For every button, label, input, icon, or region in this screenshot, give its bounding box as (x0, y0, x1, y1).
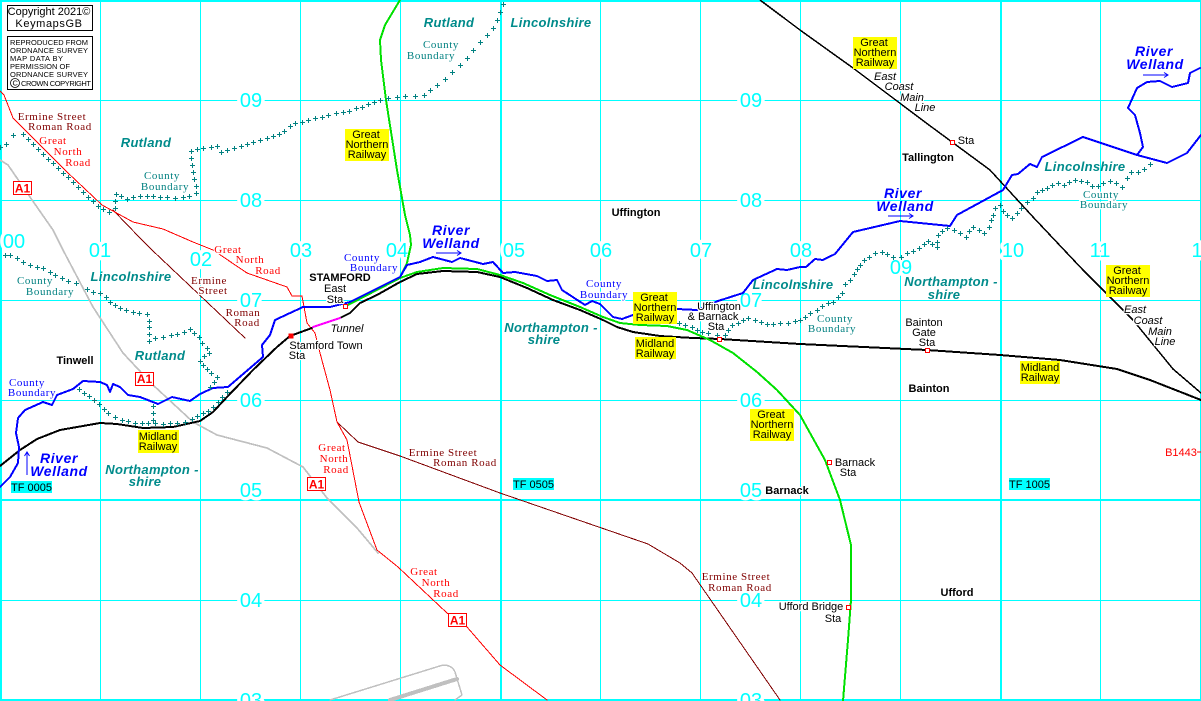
grid reference numbers: 04 (240, 590, 262, 612)
grid reference numbers: 06 (740, 390, 762, 412)
River Welland label, south west (24, 450, 88, 479)
county names: Lincolnshire (1045, 159, 1125, 174)
county boundary labels: Boundary (1080, 199, 1128, 211)
Ermine Street labels: Roman (226, 307, 260, 319)
label: Midland Railway, east: Midland (1021, 362, 1059, 374)
road sign B1443: B1443 (1165, 447, 1197, 459)
East Coast Main Line label, north: Main (900, 92, 924, 104)
label: Great Northern Railway, east: Northern (1107, 275, 1149, 287)
label: Great Northern Railway, Uffington: Railway (636, 312, 675, 324)
Ordnance Survey notice: CROWN COPYRIGHT (21, 79, 91, 88)
county boundary labels: County (817, 313, 853, 325)
road sign A1 north: A1 (15, 182, 30, 196)
Great North Road (0, 91, 547, 700)
grid reference numbers: 06 (240, 390, 262, 412)
grid reference numbers: 03 (290, 240, 312, 262)
grid reference numbers: 09 (890, 257, 912, 279)
county boundary labels: County (17, 275, 53, 287)
county boundary labels: Boundary (407, 50, 455, 62)
station names: Barnack (835, 457, 876, 469)
station names: Ufford Bridge (779, 601, 843, 613)
place names: Uffington (612, 207, 661, 219)
station names: East (324, 283, 346, 295)
label: Midland Railway, centre: Midland (636, 338, 674, 350)
label: Great Northern Railway, Uffington (633, 292, 677, 324)
county boundary labels: County (144, 170, 180, 182)
county boundary crosses: west (5, 255, 217, 387)
Ermine Street labels: Ermine (191, 275, 227, 287)
grid reference numbers: 02 (190, 249, 212, 271)
county names: Northampton - (904, 274, 998, 289)
place names: Tallington (902, 152, 954, 164)
label: Great Northern Railway, east: Great (1113, 265, 1141, 277)
grid reference numbers: 09 (740, 90, 762, 112)
county names: Northampton - (504, 320, 598, 335)
River Welland label, centre: River (884, 185, 923, 201)
grid reference numbers: 00 (3, 231, 25, 253)
Ermine Street labels: Roman Road (433, 457, 497, 469)
airfield outline (330, 665, 462, 700)
station names: Sta (840, 467, 857, 479)
county boundary labels: County (1083, 189, 1119, 201)
river county boundary labels: County (344, 252, 380, 264)
Ermine Street Roman road (113, 210, 780, 700)
county boundary labels: Boundary (141, 181, 189, 193)
River Welland label, Stamford: Welland (422, 235, 480, 251)
label: Great Northern Railway, Tallington (853, 37, 897, 69)
place names (56, 152, 974, 599)
county boundary crosses: east (679, 164, 1150, 335)
copyright box: Copyright 2021© (8, 6, 90, 18)
Stamford tunnel (313, 318, 340, 327)
Great North Road labels: North (320, 453, 348, 465)
East Coast Main Line label, north (874, 71, 935, 114)
station names: Sta (825, 613, 842, 625)
grid reference numbers: 07 (740, 290, 762, 312)
grid reference numbers: 08 (740, 190, 762, 212)
grid reference numbers: 05 (240, 480, 262, 502)
label: Great Northern Railway, north Stamford (345, 129, 389, 161)
label: Great Northern Railway, north Stamford: Northern (346, 139, 388, 151)
label: Midland Railway, centre: Railway (636, 348, 675, 360)
River Welland label, north east: River (1135, 43, 1174, 59)
grid reference numbers: 04 (740, 590, 762, 612)
label: Great Northern Railway, north Stamford: Great (352, 129, 380, 141)
label: Midland Railway, west: Railway (139, 441, 178, 453)
Great North Road labels: North (236, 254, 264, 266)
Great North Road labels: Great (39, 135, 67, 147)
Great North Road labels: North (54, 146, 82, 158)
county boundary labels: County (423, 39, 459, 51)
county boundary labels: Boundary (26, 286, 74, 298)
station names: Sta (958, 135, 975, 147)
river county boundary labels (8, 252, 628, 399)
label: Great Northern Railway, east: Railway (1109, 285, 1148, 297)
Ordnance Survey notice: MAP DATA BY (10, 54, 63, 63)
Great North Road labels: Great (410, 566, 438, 578)
county names: Lincolnshire (753, 277, 833, 292)
river county boundary labels: County (9, 377, 45, 389)
station names: Sta (327, 294, 344, 306)
label: Great Northern Railway, Tallington: Northern (854, 47, 896, 59)
label: Great Northern Railway, south: Railway (753, 429, 792, 441)
Great North Road labels: Great (318, 442, 346, 454)
grid reference numbers: 04 (386, 240, 408, 262)
East Coast Main Line label, north: Line (915, 102, 935, 114)
grid reference numbers: 06 (590, 240, 612, 262)
grid square tag TF 0505: TF 0505 (513, 479, 554, 491)
Great North Road labels: Great (214, 244, 242, 256)
Ermine Street labels: Ermine Street (702, 571, 770, 583)
River Welland label, north east (1126, 43, 1184, 78)
River Welland (0, 68, 1201, 487)
county names: shire (528, 332, 560, 347)
road sign A1 south of Stamford: A1 (309, 478, 324, 492)
label: Great Northern Railway, south: Northern (751, 419, 793, 431)
label: Midland Railway, east: Railway (1021, 372, 1060, 384)
county names: shire (129, 474, 161, 489)
label: Great Northern Railway, Tallington: Railway (856, 57, 895, 69)
Ermine Street labels: Roman Road (28, 121, 92, 133)
East Coast Main Line label, north: Coast (885, 81, 914, 93)
county boundary labels (17, 39, 1128, 335)
grid reference numbers: 07 (690, 240, 712, 262)
Great North Road labels: Road (65, 157, 91, 169)
East Coast Main Line label, south: East (1124, 304, 1147, 316)
grid reference numbers: 10 (1002, 240, 1024, 262)
county names: Rutland (135, 348, 186, 363)
grid reference numbers: 09 (240, 90, 262, 112)
road sign A1 Tinwell: A1 (137, 372, 152, 386)
station names: Uffington (697, 301, 741, 313)
grid reference numbers: 05 (503, 240, 525, 262)
label: Midland Railway, centre (635, 337, 676, 360)
county boundary labels: Boundary (808, 323, 856, 335)
county names: Lincolnshire (511, 15, 591, 30)
Ordnance Survey notice: REPRODUCED FROM (10, 38, 88, 47)
station names: Tunnel (331, 323, 364, 335)
Ordnance Survey notice (8, 36, 92, 90)
label: Great Northern Railway, Uffington: Northern (634, 302, 676, 314)
Great North Road labels: North (422, 577, 450, 589)
Great North Road labels: Road (255, 265, 281, 277)
grid reference numbers: 11 (1090, 240, 1110, 262)
Ermine Street labels: Street (198, 285, 228, 297)
river county boundary labels: Boundary (350, 262, 398, 274)
label: Great Northern Railway, Tallington: Great (860, 37, 888, 49)
grid reference numbers: 08 (790, 240, 812, 262)
place names: Ufford (940, 587, 974, 599)
East Coast Main Line label, north: East (874, 71, 897, 83)
station names: & Barnack (688, 311, 739, 323)
label: Great Northern Railway, north Stamford: Railway (348, 149, 387, 161)
station names: Sta (708, 321, 725, 333)
River Welland label, centre: Welland (876, 198, 934, 214)
station names: Stamford Town (289, 340, 363, 352)
label: Great Northern Railway, south: Great (757, 409, 785, 421)
River Welland label, south west: Welland (30, 463, 88, 479)
county names: shire (928, 287, 960, 302)
East Coast Main Line railway (760, 0, 1201, 393)
B1443 road stub (1197, 451, 1201, 453)
label: Midland Railway, east (1020, 361, 1060, 384)
Great Northern Railway line (346, 0, 851, 701)
River Welland label, south west: River (40, 450, 79, 466)
grid reference numbers: 08 (240, 190, 262, 212)
River Welland label, Stamford: River (432, 222, 471, 238)
river county boundary labels: Boundary (8, 387, 56, 399)
Great North Road labels (39, 135, 459, 600)
station markers (288, 140, 954, 610)
place names: Barnack (765, 485, 810, 497)
Midland Railway line (0, 271, 1201, 466)
grid reference numbers: 05 (740, 480, 762, 502)
county boundary crosses: north (0, 4, 503, 212)
county names (91, 15, 1125, 489)
Ordnance Survey notice: ORDNANCE SURVEY (10, 70, 88, 79)
River Welland label, centre (876, 185, 934, 218)
label: Great Northern Railway, south (750, 409, 794, 441)
station names: Gate (912, 327, 936, 339)
copyright box (8, 6, 92, 30)
county boundary crosses: short branch (152, 406, 154, 420)
Great North Road labels: Road (433, 588, 459, 600)
Ermine Street labels: Ermine Street (409, 447, 477, 459)
Ordnance Survey notice: C (12, 78, 18, 88)
river county boundary labels: Boundary (580, 289, 628, 301)
road sign A1 south: A1 (450, 614, 465, 628)
River Welland label, Stamford (422, 222, 480, 256)
county names: Northampton - (105, 462, 199, 477)
Ermine Street labels: Ermine Street (18, 111, 86, 123)
Ermine Street labels (18, 111, 772, 594)
Ordnance Survey notice: ORDNANCE SURVEY (10, 46, 88, 55)
place names: Tinwell (56, 355, 94, 367)
Ermine Street labels: Road (234, 317, 260, 329)
East Coast Main Line label, south: Coast (1134, 315, 1163, 327)
county names: Rutland (424, 15, 475, 30)
label: Midland Railway, west (138, 430, 179, 453)
station names: Sta (289, 350, 306, 362)
East Coast Main Line label, south (1124, 304, 1175, 348)
station names (289, 135, 975, 625)
river county boundary labels: County (586, 278, 622, 290)
place names: STAMFORD (309, 272, 371, 284)
label: Great Northern Railway, Uffington: Great (640, 292, 668, 304)
East Coast Main Line label, south: Line (1155, 336, 1175, 348)
River Welland label, north east: Welland (1126, 56, 1184, 72)
grid square tag TF 1005: TF 1005 (1009, 479, 1050, 491)
station names: Sta (919, 337, 936, 349)
grid reference numbers: 07 (240, 290, 262, 312)
copyright box: KeymapsGB (15, 18, 83, 30)
station names: Bainton (905, 317, 943, 329)
Ermine Street labels: Roman Road (708, 582, 772, 594)
place names: Bainton (909, 383, 950, 395)
county names: Rutland (121, 135, 172, 150)
Ordnance Survey notice: PERMISSION OF (10, 62, 70, 71)
county names: Lincolnshire (91, 269, 171, 284)
A1 modern road (0, 160, 378, 553)
grid reference numbers: 01 (89, 240, 111, 262)
grid square tag TF 0005: TF 0005 (11, 482, 52, 494)
Great North Road labels: Road (323, 464, 349, 476)
East Coast Main Line label, south: Main (1148, 326, 1172, 338)
label: Great Northern Railway, east (1106, 265, 1150, 297)
county boundary crosses: south of the Welland (79, 389, 227, 424)
label: Midland Railway, west: Midland (139, 431, 177, 443)
